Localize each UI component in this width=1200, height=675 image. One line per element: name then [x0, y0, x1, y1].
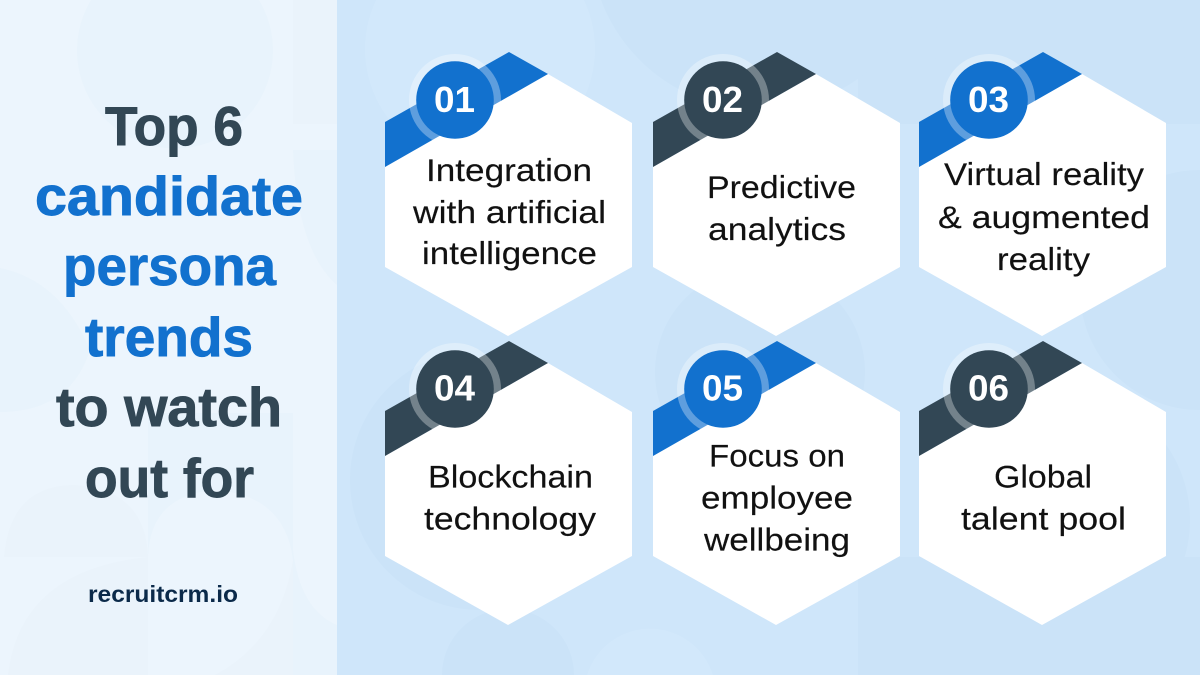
number badge 01 — [409, 54, 501, 146]
number badge 05: 05 — [702, 368, 743, 408]
text: trend 06 — [961, 458, 1126, 536]
title — [35, 95, 303, 509]
number badge 04: 04 — [434, 368, 475, 408]
text: trend 04 — [424, 458, 596, 536]
text: trend 02 — [707, 169, 856, 247]
number badge 01: 01 — [434, 79, 475, 120]
number badge 03 — [943, 54, 1035, 146]
text: trend 04: technology — [424, 500, 596, 536]
text: trend 04: Blockchain — [428, 458, 593, 494]
text: trend 01 — [412, 152, 606, 271]
panel: trend 06 — [919, 341, 1166, 625]
number badge 05 — [677, 343, 769, 435]
ribbon 03 — [919, 52, 1082, 167]
text: trend 01: intelligence — [422, 235, 597, 271]
text: trend 05 — [701, 438, 853, 558]
number badge 03: 03 — [968, 79, 1009, 120]
text: trend 02: Predictive — [707, 169, 856, 205]
title line: out for: out for — [85, 447, 254, 509]
number badge 02: 02 — [702, 79, 743, 120]
panel: trend 02 — [653, 52, 900, 336]
panel: trend 05 — [653, 341, 900, 625]
text: trend 05: Focus on — [709, 438, 845, 474]
title line: trends: trends — [85, 306, 253, 368]
text: trend 03: reality — [997, 241, 1090, 277]
text: trend 06: Global — [994, 458, 1092, 494]
number badge 02 — [677, 54, 769, 146]
ribbon 02 — [653, 52, 816, 167]
text: trend 06: talent pool — [961, 500, 1126, 536]
ribbon 05 — [653, 341, 816, 456]
number badge 04 — [409, 343, 501, 435]
text: trend 05: employee — [701, 480, 853, 516]
panel: left title panel — [0, 0, 337, 675]
text: trend 03 — [938, 156, 1150, 277]
text: trend 01: Integration — [426, 152, 592, 188]
website label: recruitcrm.io — [88, 581, 238, 607]
text: trend 01: with artificial — [412, 194, 606, 230]
ribbon 04 — [385, 341, 548, 456]
number badge 06: 06 — [968, 368, 1009, 408]
text: trend 02: analytics — [708, 211, 846, 247]
title line: Top 6: Top 6 — [105, 95, 243, 157]
title line: candidate: candidate — [35, 165, 303, 227]
text: trend 03: Virtual reality — [944, 156, 1144, 192]
ribbon 01 — [385, 52, 548, 167]
number badge 06 — [943, 343, 1035, 435]
panel: trend 04 — [385, 341, 632, 625]
text: trend 05: wellbeing — [703, 522, 850, 558]
title line: to watch: to watch — [56, 376, 282, 438]
title line: persona: persona — [63, 235, 276, 297]
panel: trend 01 — [385, 52, 632, 336]
panel: trend 03 — [919, 52, 1166, 336]
text: trend 03: & augmented — [938, 199, 1150, 235]
ribbon 06 — [919, 341, 1082, 456]
